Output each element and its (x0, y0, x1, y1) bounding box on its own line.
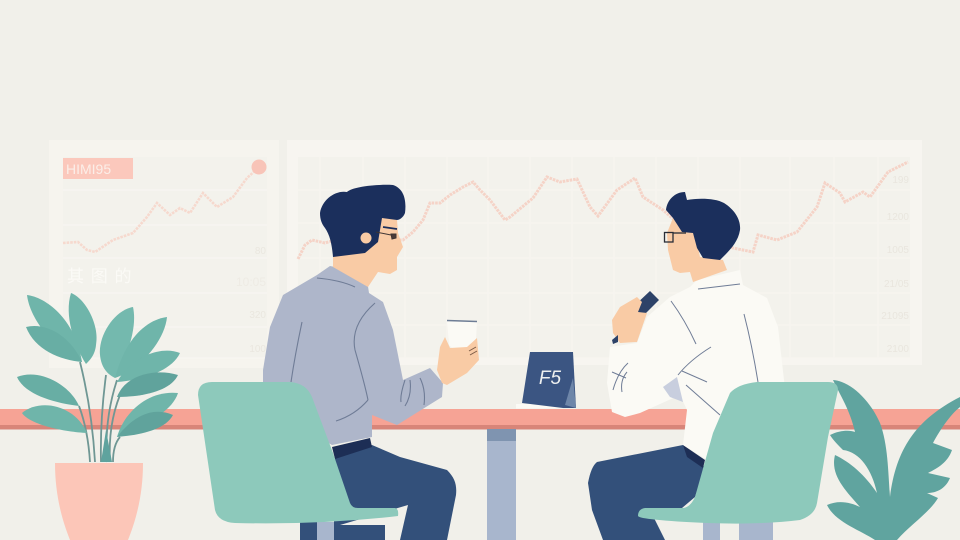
hand and cup (437, 320, 479, 385)
shirt (263, 266, 443, 445)
leaves (17, 293, 180, 437)
marker: chart end point (252, 160, 266, 174)
trousers (334, 445, 456, 540)
chair: left (198, 382, 398, 523)
axis labels: main chart: 1005 (887, 245, 909, 256)
neck and face (333, 215, 403, 287)
shirt creases (612, 284, 758, 415)
sleeve shadow (663, 377, 683, 402)
chair legs: left (300, 522, 334, 540)
panel: main chart (287, 140, 922, 365)
plant: right foliage (827, 380, 960, 540)
axis labels: main chart: 21/05 (884, 279, 909, 290)
table (0, 409, 960, 540)
brow and glasses (376, 227, 397, 239)
ear (360, 232, 372, 244)
axis labels: left chart: 80 (255, 246, 266, 257)
stems (79, 362, 120, 462)
sign: desk placard: F5 (539, 368, 562, 389)
axis labels: main chart: 2100 (887, 344, 909, 355)
glasses (664, 232, 686, 242)
axis labels: left chart: 10:05 (236, 275, 266, 289)
axis labels: main chart (881, 175, 909, 355)
shirt (607, 270, 790, 460)
belt (332, 438, 372, 459)
chair legs: right (703, 522, 773, 540)
belt (683, 445, 705, 468)
shirt creases (291, 278, 424, 421)
pot (55, 463, 143, 540)
text: left chart sub-label: 其 图 的 (67, 267, 132, 286)
phone (633, 291, 659, 317)
pen end (612, 335, 618, 344)
hand (612, 297, 647, 343)
chair: right (638, 382, 838, 524)
axis labels: main chart: 199 (892, 175, 909, 186)
axis labels: main chart: 21095 (881, 311, 909, 322)
neck and face (667, 218, 727, 282)
hair (666, 192, 740, 260)
sign: desk placard (516, 352, 576, 408)
axis labels: left chart: 320 (249, 310, 266, 321)
trousers (588, 445, 705, 540)
person: right analyst (588, 192, 790, 540)
axis labels: left chart (236, 246, 266, 355)
person: left analyst (263, 185, 479, 540)
axis labels: left chart: 100 (249, 344, 266, 355)
axis labels: main chart: 1200 (887, 212, 909, 223)
line chart: main candles (298, 162, 908, 259)
plant: left potted plant (17, 293, 180, 540)
panel: left chart (49, 140, 279, 368)
label: left chart tag (63, 158, 133, 179)
line chart: left candles (63, 168, 258, 252)
label: left chart tag: HIMI95 (66, 161, 111, 177)
hair (320, 185, 405, 257)
